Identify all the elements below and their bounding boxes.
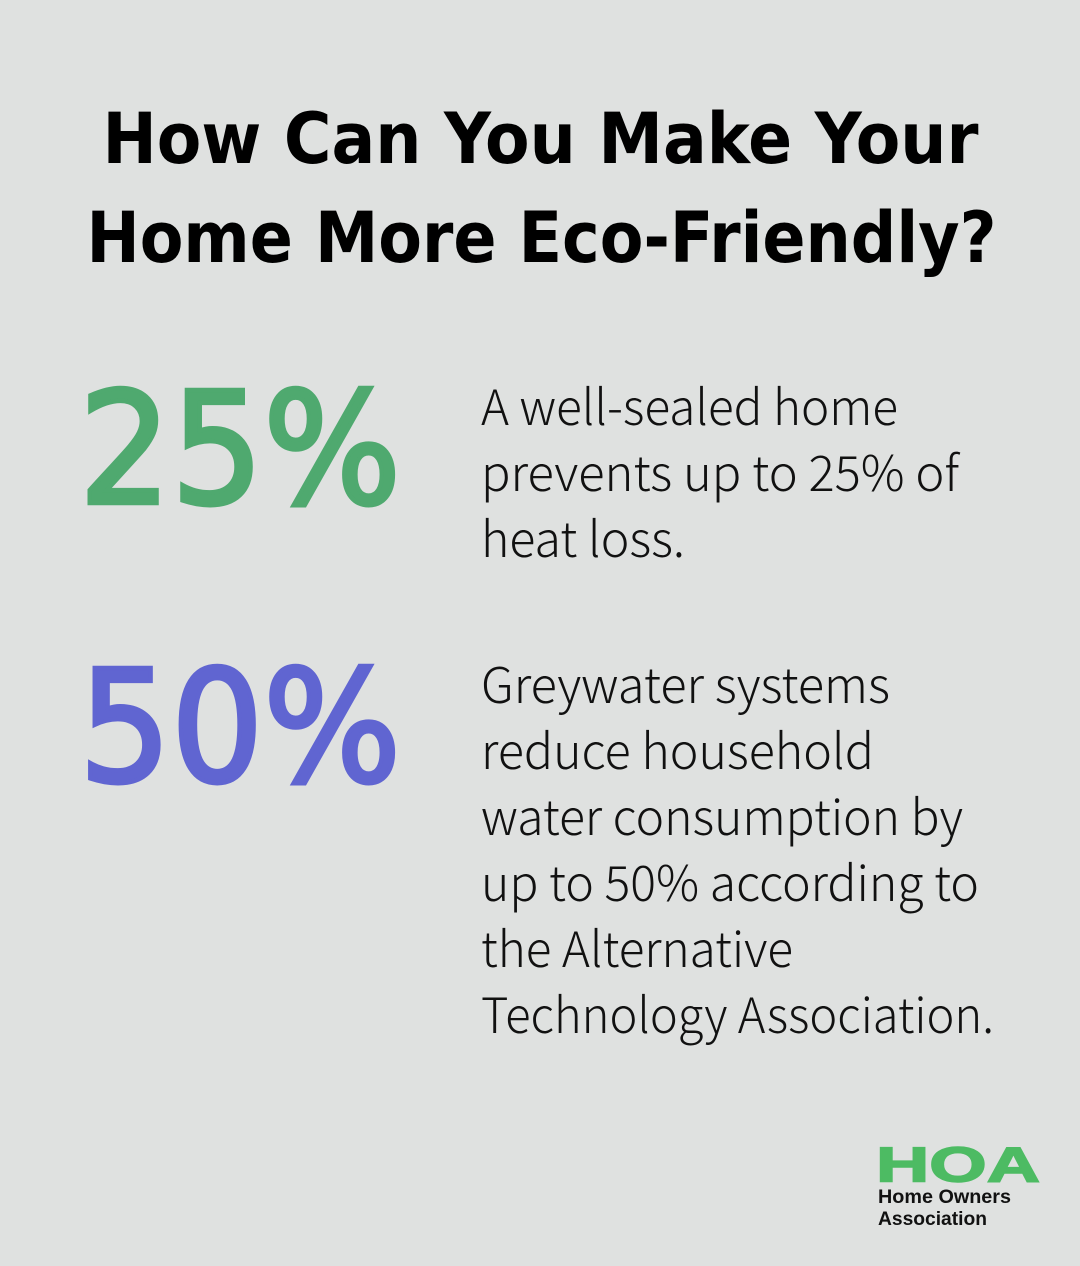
text block: greywater: Technology Association. — [481, 977, 994, 1048]
stat: 50%: 50% — [79, 637, 401, 818]
title: How Can You Make Your — [102, 98, 979, 180]
title: Home More Eco-Friendly? — [86, 197, 996, 279]
text block: heat loss: prevents up to 25% of — [481, 435, 960, 506]
text block: greywater: Greywater systems — [481, 647, 890, 718]
text block: greywater: water consumption by — [481, 779, 963, 850]
logo text: Home Owners — [878, 1187, 1011, 1208]
text block: greywater: up to 50% according to — [481, 845, 979, 916]
text block: greywater — [481, 647, 994, 1048]
text block: heat loss — [481, 369, 960, 572]
logo text: Association — [878, 1209, 987, 1230]
text block: heat loss: heat loss. — [481, 501, 685, 572]
stat: 25%: 25% — [79, 359, 401, 540]
text block: greywater: reduce household — [481, 713, 874, 784]
logo wordmark: HOA — [876, 1138, 1040, 1192]
logo: HOA — [876, 1138, 1040, 1230]
text block: heat loss: A well-sealed home — [481, 369, 898, 440]
text block: greywater: the Alternative — [481, 911, 793, 982]
logo text — [878, 1187, 1011, 1230]
title — [86, 98, 996, 279]
